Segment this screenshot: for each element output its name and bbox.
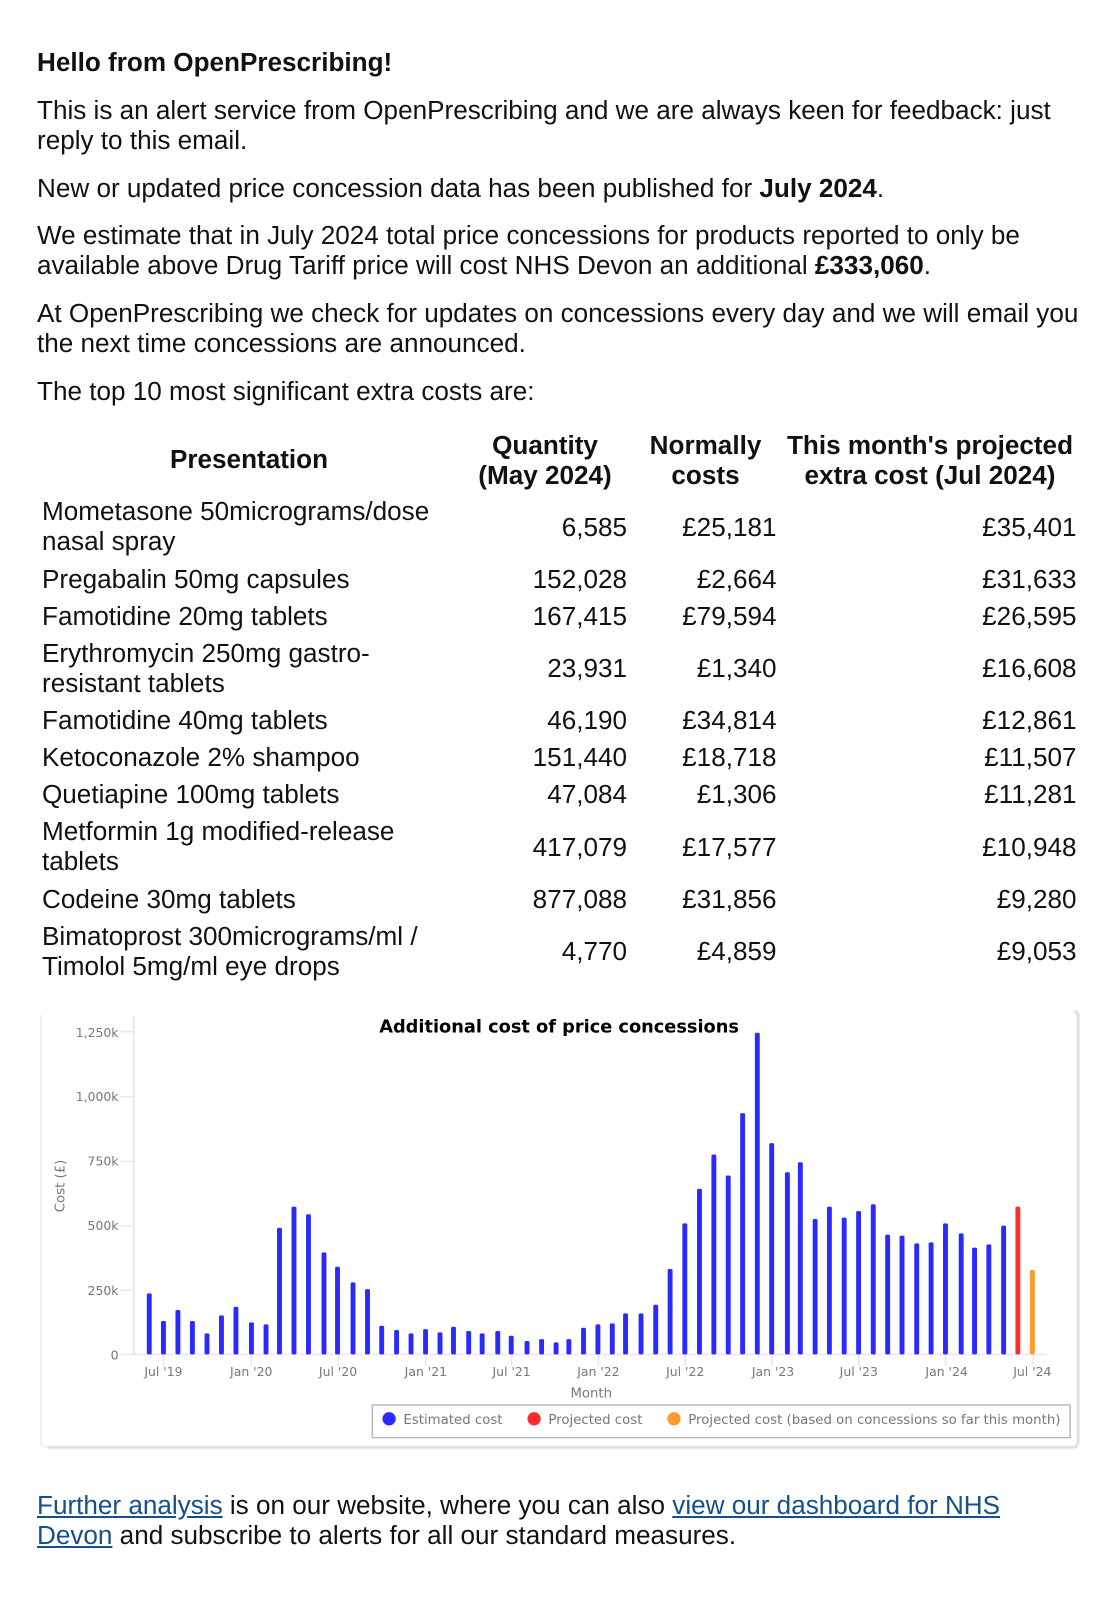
table header: This month's projected — [787, 430, 1073, 460]
y axis: 1,250k — [76, 1025, 119, 1040]
row: Metformin: Metformin 1g modified-release — [42, 816, 394, 846]
row: Bimatoprost — [42, 921, 1076, 981]
y axis: 500k — [88, 1218, 119, 1233]
text block: estimate: We estimate that in July 2024 total price concessions for products reported to only be — [37, 220, 1020, 250]
table header: costs — [671, 460, 740, 490]
table header: Presentation — [170, 444, 328, 474]
row: Bimatoprost: Timolol 5mg/ml eye drops — [42, 951, 340, 981]
row: Famotidine 20mg — [42, 601, 1076, 631]
row: Quetiapine: 47,084 — [547, 779, 627, 809]
row: Ketoconazole: £18,718 — [682, 742, 776, 772]
row: Quetiapine: £1,306 — [697, 779, 776, 809]
row: Famotidine 40mg: 46,190 — [547, 705, 627, 735]
row: Famotidine 40mg — [42, 705, 1076, 735]
row: Famotidine 20mg: £79,594 — [682, 601, 776, 631]
table header: Quantity — [492, 430, 598, 460]
x axis labels: Jul '19 — [143, 1364, 183, 1379]
text block: further analysis links: Devon and subscribe to alerts for all our standard measures. — [37, 1520, 736, 1550]
x axis labels: Jul '24 — [1012, 1364, 1052, 1379]
row: Mometasone — [42, 496, 1076, 556]
text block: updates: the next time concessions are announced. — [37, 328, 526, 358]
chart title: Additional cost of price concessions — [379, 1017, 739, 1037]
row: Mometasone: £25,181 — [682, 512, 776, 542]
table: top 10 extra costs — [42, 430, 1076, 981]
heading: greeting: Hello from OpenPrescribing! — [37, 47, 392, 77]
text block: further analysis links: Further analysis is on our website, where you can also view our dashboard for NHS — [37, 1490, 1000, 1520]
x axis labels: Jan '21 — [404, 1364, 447, 1379]
table header: extra cost (Jul 2024) — [805, 460, 1055, 490]
y axis — [76, 1016, 1047, 1366]
legend: Projected cost — [548, 1413, 642, 1428]
legend: Estimated cost — [403, 1413, 503, 1428]
text block: further analysis links — [37, 1490, 1000, 1550]
row: Erythromycin: 23,931 — [547, 653, 627, 683]
row: Quetiapine — [42, 779, 1076, 809]
row: Metformin: tablets — [42, 846, 119, 876]
x axis labels: Jan '23 — [751, 1364, 794, 1379]
row: Mometasone: nasal spray — [42, 526, 175, 556]
y axis: 250k — [88, 1283, 119, 1298]
row: Ketoconazole: £11,507 — [984, 742, 1076, 772]
text block: table intro: The top 10 most significant extra costs are: — [37, 376, 534, 406]
text block: intro — [37, 95, 1051, 155]
table header: (May 2024) — [478, 460, 612, 490]
bar: projected cost so far this month — [1030, 1270, 1035, 1354]
x axis labels: Jan '22 — [576, 1364, 620, 1379]
row: Pregabalin: Pregabalin 50mg capsules — [42, 564, 350, 594]
card outline — [41, 1011, 1078, 1447]
text block: data published: New or updated price concession data has been published for July 2024. — [37, 173, 884, 203]
x axis labels: Jan '24 — [924, 1364, 968, 1379]
row: Codeine: Codeine 30mg tablets — [42, 884, 296, 914]
x axis labels: Jan '20 — [229, 1364, 273, 1379]
x axis labels: Jul '22 — [665, 1364, 704, 1379]
x axis labels: Jul '20 — [318, 1364, 357, 1379]
row: Codeine: £9,280 — [997, 884, 1076, 914]
text block: estimate: available above Drug Tariff price will cost NHS Devon an additional £333,060. — [37, 250, 931, 280]
x axis labels: Jul '23 — [839, 1364, 878, 1379]
x axis title: Month — [570, 1386, 612, 1401]
row: Quetiapine: Quetiapine 100mg tablets — [42, 779, 339, 809]
row: Mometasone: £35,401 — [982, 512, 1076, 542]
row: Ketoconazole — [42, 742, 1076, 772]
row: Pregabalin: £2,664 — [697, 564, 776, 594]
row: Mometasone: 6,585 — [562, 512, 627, 542]
row: Erythromycin: resistant tablets — [42, 668, 225, 698]
row: Famotidine 40mg: £34,814 — [682, 705, 776, 735]
row: Metformin — [42, 816, 1076, 876]
row: Bimatoprost: 4,770 — [562, 936, 627, 966]
row: Metformin: £10,948 — [982, 832, 1076, 862]
legend — [372, 1405, 1070, 1438]
row: Pregabalin: 152,028 — [533, 564, 627, 594]
row: Erythromycin — [42, 638, 1076, 698]
row: Bimatoprost: Bimatoprost 300micrograms/ml / — [42, 921, 418, 951]
row: Metformin: £17,577 — [682, 832, 776, 862]
y axis: 1,000k — [76, 1089, 119, 1104]
row: Erythromycin: £1,340 — [697, 653, 776, 683]
row: Quetiapine: £11,281 — [984, 779, 1076, 809]
row: Metformin: 417,079 — [533, 832, 627, 862]
row: Pregabalin — [42, 564, 1076, 594]
text block: intro: This is an alert service from OpenPrescribing and we are always keen for feedback: just — [37, 95, 1051, 125]
row: Codeine — [42, 884, 1076, 914]
y axis: 0 — [111, 1348, 119, 1363]
y axis: 750k — [88, 1154, 119, 1169]
row: Bimatoprost: £9,053 — [997, 936, 1076, 966]
legend: Projected cost (based on concessions so far this month) — [688, 1413, 1060, 1428]
x axis labels: Jul '21 — [492, 1364, 531, 1379]
row: Pregabalin: £31,633 — [982, 564, 1076, 594]
row: Famotidine 20mg: Famotidine 20mg tablets — [42, 601, 328, 631]
row: Famotidine 40mg: Famotidine 40mg tablets — [42, 705, 328, 735]
row: Bimatoprost: £4,859 — [697, 936, 776, 966]
row: Famotidine 20mg: 167,415 — [533, 601, 627, 631]
y axis title: Cost (£) — [53, 1160, 68, 1212]
row: Mometasone: Mometasone 50micrograms/dose — [42, 496, 429, 526]
row: Erythromycin: £16,608 — [982, 653, 1076, 683]
row: Famotidine 40mg: £12,861 — [982, 705, 1076, 735]
bars: estimated cost — [147, 1033, 1006, 1354]
row: Ketoconazole: 151,440 — [533, 742, 627, 772]
x axis labels — [143, 1364, 1052, 1379]
row: Codeine: 877,088 — [533, 884, 627, 914]
row: Erythromycin: Erythromycin 250mg gastro- — [42, 638, 370, 668]
table header: Normally — [650, 430, 761, 460]
row: Ketoconazole: Ketoconazole 2% shampoo — [42, 742, 360, 772]
text block: intro: reply to this email. — [37, 125, 247, 155]
table header — [170, 430, 1073, 490]
text block: estimate — [37, 220, 1020, 280]
text block: updates: At OpenPrescribing we check for updates on concessions every day and we will email you — [37, 298, 1078, 328]
bar: projected cost — [1015, 1207, 1020, 1354]
row: Famotidine 20mg: £26,595 — [982, 601, 1076, 631]
row: Codeine: £31,856 — [682, 884, 776, 914]
text block: updates — [37, 298, 1078, 358]
